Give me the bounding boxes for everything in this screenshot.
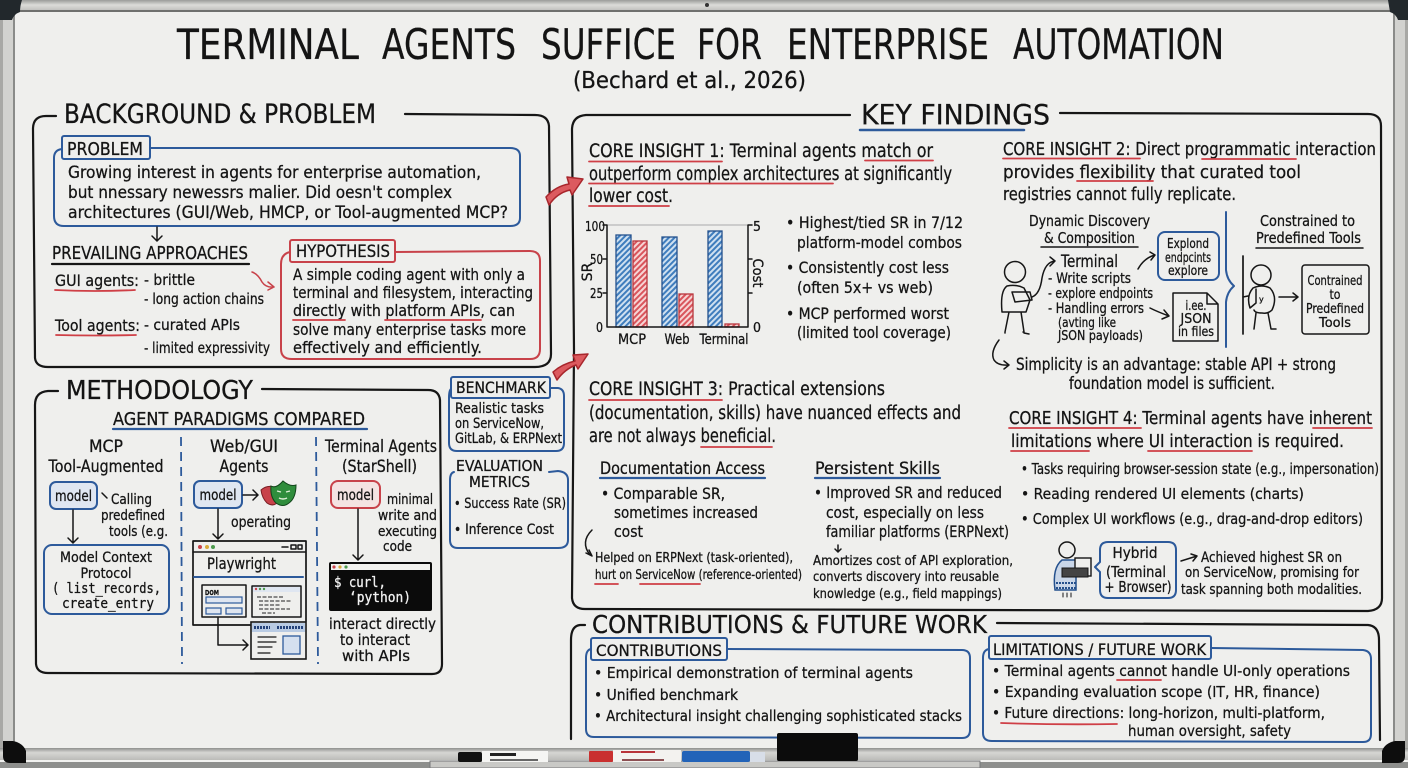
column: terminal agents: code	[383, 539, 412, 555]
callout: simplicity is an advantage: Simplicity is an advantage: stable API + strong	[1016, 355, 1336, 374]
problem box: architectures (GUI/Web, HMCP, or Tool-augmented MCP?	[68, 203, 508, 223]
code panel	[252, 586, 301, 617]
bullet list: insight 1 results: platform-model combos	[797, 233, 962, 252]
persistent skills: familiar platforms (ERPNext)	[826, 522, 1009, 541]
panel: benchmark: GitLab, & ERPNext	[455, 431, 562, 447]
diagram: constrained to predefined tools: Constrained to	[1260, 212, 1355, 230]
model context protocol box: create_entry	[62, 596, 154, 612]
diagram: dynamic discovery and composition: - explore endpoints	[1048, 286, 1153, 302]
documentation access: sometimes increased	[614, 503, 758, 522]
column: terminal agents: (StarShell)	[342, 457, 417, 477]
column: MCP tool-augmented: MCP	[89, 437, 123, 457]
core insight 4: limitations where UI interaction is required.	[1011, 431, 1344, 452]
bar chart: success rate and cost: SR	[580, 262, 596, 281]
bar chart: success rate and cost: 25	[590, 287, 603, 302]
diagram: constrained to predefined tools: Predefined Tools	[1256, 229, 1361, 247]
core insight 3	[585, 379, 1013, 602]
icon: person with laptop	[1054, 542, 1091, 597]
model context protocol box: Model Context	[60, 550, 152, 566]
column: web and GUI agents: operating	[231, 513, 291, 531]
core insight 4	[1009, 408, 1379, 598]
model box	[194, 481, 242, 508]
panel: evaluation metrics: • Success Rate (SR)	[454, 496, 566, 512]
column: MCP tool-augmented: predefined	[101, 508, 165, 524]
document: JSON in files	[1173, 293, 1218, 341]
heading: key findings: KEY FINDINGS	[861, 98, 1050, 131]
diagram: dynamic discovery and composition: Dynamic Discovery	[1029, 212, 1150, 230]
small app window	[251, 622, 306, 659]
core insight 4: on ServiceNow, promising for	[1185, 565, 1359, 581]
prevailing approaches: GUI agents:	[55, 271, 139, 290]
blue marker	[682, 751, 765, 762]
prevailing approaches	[52, 243, 270, 357]
hypothesis box: HYPOTHESIS	[296, 242, 390, 262]
column: MCP tool-augmented: Calling	[111, 492, 152, 508]
box: explore endpoints: Explond	[1167, 237, 1209, 252]
panel: evaluation metrics: METRICS	[469, 473, 530, 491]
core insight 3: (documentation, skills) have nuanced effects and	[589, 403, 961, 424]
column: web and GUI agents: Agents	[220, 457, 269, 477]
panel: background and problem	[33, 99, 551, 367]
heading: agent paradigms compared: AGENT PARADIGMS COMPARED	[113, 409, 365, 430]
bullet list: insight 1 results: (often 5x+ vs web)	[797, 278, 933, 297]
model context protocol box	[44, 545, 169, 614]
hypothesis box: directly with platform APIs, can	[293, 301, 515, 320]
bar chart: success rate and cost: Cost	[749, 258, 765, 288]
box: constrained to predefined tools: Contrained	[1308, 273, 1362, 289]
documentation access: Documentation Access	[600, 459, 765, 478]
terminal window: $ curl,	[334, 575, 386, 591]
DOM panel: DOM	[205, 589, 219, 597]
diagram: dynamic discovery and composition: - Write scripts	[1048, 271, 1131, 287]
panel: benchmark: BENCHMARK	[456, 378, 546, 397]
column: MCP tool-augmented: Tool-Augmented	[48, 457, 163, 477]
bar chart: success rate and cost: MCP	[618, 332, 646, 348]
persistent skills: knowledge (e.g., field mappings)	[813, 586, 1002, 602]
document: JSON in files: in files	[1178, 325, 1214, 340]
prevailing approaches: Tool agents:	[54, 316, 140, 335]
hybrid box: Hybrid	[1112, 544, 1158, 562]
box: explore endpoints: explore	[1168, 264, 1208, 279]
column: terminal agents: interact directly	[329, 615, 436, 633]
black marker	[458, 751, 548, 762]
hypothesis box: effectively and efficiently.	[293, 338, 482, 357]
panel: benchmark: on ServiceNow,	[455, 416, 544, 432]
hybrid box	[1095, 542, 1176, 598]
core insight 1: lower cost.	[589, 186, 673, 207]
title: TERMINAL	[176, 20, 359, 69]
document: JSON in files: i.ee.	[1186, 299, 1206, 314]
model box: model	[200, 486, 236, 504]
heading: background and problem: BACKGROUND & PROBLEM	[64, 99, 376, 130]
persistent skills: converts discovery into reusable	[813, 569, 999, 585]
box: constrained to predefined tools: Tools	[1318, 315, 1351, 331]
icon: person constrained: y	[1259, 295, 1264, 304]
callout: simplicity is an advantage: foundation model is sufficient.	[1069, 374, 1275, 393]
column: terminal agents: executing	[378, 524, 437, 540]
documentation access: hurt on ServiceNow (reference-oriented)	[595, 568, 802, 583]
hypothesis box: A simple coding agent with only a	[293, 265, 525, 284]
eraser	[777, 733, 858, 761]
model box	[50, 482, 97, 509]
panel: contributions and future work	[571, 610, 1380, 742]
limitations and future work box: LIMITATIONS / FUTURE WORK	[993, 640, 1206, 659]
bar chart: success rate and cost: 0	[753, 321, 761, 336]
core insight 3: CORE INSIGHT 3: Practical extensions	[589, 379, 885, 400]
problem box: Growing interest in agents for enterprise automation,	[68, 163, 481, 183]
box: constrained to predefined tools	[1302, 265, 1369, 334]
contributions box	[586, 638, 970, 738]
marker tray	[458, 733, 858, 762]
column: terminal agents	[324, 437, 437, 665]
title: ENTERPRISE	[787, 20, 989, 69]
panel: evaluation metrics	[450, 457, 568, 548]
persistent skills: cost, especially on less	[826, 503, 984, 522]
core insight 4: Achieved highest SR on	[1201, 550, 1342, 566]
title: SUFFICE	[541, 20, 676, 69]
bullet list: insight 1 results: (limited tool coverage)	[797, 323, 951, 342]
diagram: constrained to predefined tools	[1243, 212, 1369, 334]
box: explore endpoints: endpcints	[1165, 251, 1211, 266]
persistent skills: Persistent Skills	[815, 459, 940, 478]
document: JSON in files: JSON	[1180, 312, 1212, 327]
callout: simplicity is an advantage	[993, 340, 1336, 393]
column: terminal agents: write and	[378, 508, 437, 524]
model context protocol box: ( list_records,	[52, 581, 161, 597]
heading: methodology: METHODOLOGY	[66, 376, 253, 406]
limitations and future work box: • Future directions: long-horizon, multi-platform,	[992, 704, 1325, 722]
column: terminal agents: with APIs	[342, 647, 410, 665]
diagram: dynamic discovery and composition: & Composition	[1044, 229, 1135, 247]
title	[176, 20, 1224, 69]
prevailing approaches: - long action chains	[144, 290, 264, 308]
core insight 4: • Reading rendered UI elements (charts)	[1021, 485, 1304, 503]
problem box: but nnessary newessrs malier. Did oesn't complex	[68, 183, 452, 203]
model box: model	[337, 486, 374, 504]
box: constrained to predefined tools: Predefined	[1306, 301, 1364, 317]
bar chart: success rate and cost: Terminal	[699, 332, 748, 348]
heading: contributions and future work: CONTRIBUTIONS & FUTURE WORK	[592, 610, 988, 639]
documentation access: Helped on ERPNext (task-oriented),	[595, 551, 793, 566]
arrow: methodology to key findings	[553, 354, 588, 380]
terminal window	[329, 562, 432, 611]
documentation access: • Comparable SR,	[601, 484, 725, 503]
column: web and GUI agents	[193, 437, 437, 665]
persistent skills	[813, 459, 1013, 602]
bullet list: insight 1 results	[786, 213, 963, 342]
model box: model	[55, 487, 92, 505]
persistent skills: • Improved SR and reduced	[814, 483, 1002, 502]
core insight 2	[993, 139, 1376, 393]
bar chart: success rate and cost	[580, 220, 765, 348]
arrow: model to protocol	[68, 510, 78, 543]
column: MCP tool-augmented	[44, 437, 169, 614]
bullet list: insight 1 results: • Highest/tied SR in 7/12	[786, 213, 963, 232]
hypothesis box: terminal and filesystem, interacting	[293, 283, 533, 302]
persistent skills: Amortizes cost of API exploration,	[813, 553, 1013, 569]
arrow: model to browser	[213, 509, 223, 539]
core insight 4: task spanning both modalities.	[1181, 582, 1362, 598]
arrow: model to terminal	[353, 509, 363, 560]
contributions box: • Architectural insight challenging sophisticated stacks	[594, 707, 962, 725]
core insight 1: CORE INSIGHT 1: Terminal agents match or	[589, 141, 933, 162]
prevailing approaches: - limited expressivity	[144, 339, 270, 357]
column: MCP tool-augmented: tools (e.g.	[109, 524, 168, 540]
documentation access: cost	[614, 522, 643, 541]
hybrid box: (Terminal	[1106, 563, 1166, 581]
box: explore endpoints	[1158, 232, 1219, 280]
arrow: approaches to hypothesis	[252, 272, 274, 290]
panel: evaluation metrics: • Inference Cost	[454, 522, 554, 538]
box: constrained to predefined tools: to	[1330, 287, 1340, 303]
limitations and future work box	[983, 636, 1371, 742]
hypothesis box	[281, 240, 540, 359]
core insight 2: registries cannot fully replicate.	[1003, 184, 1236, 205]
title: AUTOMATION	[1013, 20, 1224, 69]
contributions box: • Unified benchmark	[594, 686, 738, 704]
diagram: dynamic discovery and composition	[1002, 212, 1219, 344]
hypothesis box: solve many enterprise tasks more	[293, 320, 526, 339]
diagram: dynamic discovery and composition: Terminal	[1060, 252, 1118, 272]
browser window: playwright	[193, 541, 306, 659]
diagram: dynamic discovery and composition: - Handling errors	[1048, 301, 1144, 317]
column: web and GUI agents: Web/GUI	[210, 437, 278, 457]
core insight 3: are not always beneficial.	[589, 426, 776, 447]
model context protocol box: Protocol	[80, 566, 132, 582]
model box	[331, 481, 380, 508]
contributions box: • Empirical demonstration of terminal agents	[594, 664, 913, 682]
bar chart: success rate and cost: Web	[664, 332, 690, 348]
panel: evaluation metrics: EVALUATION	[456, 457, 543, 475]
icon: theatre masks	[261, 481, 296, 506]
panel: key findings	[572, 98, 1382, 611]
problem box	[54, 136, 520, 226]
arrow: problem to approaches	[152, 227, 162, 241]
bar chart: success rate and cost: 50	[590, 253, 603, 268]
contributions box: CONTRIBUTIONS	[596, 641, 722, 660]
terminal window: ‘python)	[349, 590, 411, 606]
panel: benchmark	[449, 377, 564, 451]
red marker	[589, 750, 681, 762]
documentation access	[585, 459, 802, 584]
limitations and future work box: • Terminal agents cannot handle UI-only operations	[992, 662, 1350, 680]
limitations and future work box: • Expanding evaluation scope (IT, HR, finance)	[992, 683, 1320, 701]
problem box: PROBLEM	[67, 139, 143, 160]
bar chart: success rate and cost: 5	[753, 220, 761, 235]
prevailing approaches: - curated APIs	[144, 316, 240, 334]
icon: person with notes	[1002, 262, 1032, 334]
core insight 1: outperform complex architectures at significantly	[589, 164, 952, 185]
diagram: dynamic discovery and composition: JSON payloads)	[1057, 329, 1143, 344]
column: terminal agents: to interact	[340, 631, 410, 649]
browser window: playwright: Playwright	[207, 554, 276, 573]
column: terminal agents: minimal	[387, 492, 433, 508]
bar chart: success rate and cost: 100	[585, 220, 605, 235]
bullet list: insight 1 results: • Consistently cost less	[786, 258, 949, 277]
diagram: dynamic discovery and composition: (avting like	[1058, 316, 1116, 331]
prevailing approaches: PREVAILING APPROACHES	[52, 243, 248, 264]
bullet list: insight 1 results: • MCP performed worst	[786, 304, 949, 323]
brace divider	[1226, 212, 1234, 347]
column: terminal agents: Terminal Agents	[324, 437, 437, 457]
limitations and future work box: human oversight, safety	[1128, 722, 1291, 740]
prevailing approaches: - brittle	[144, 271, 195, 289]
title: AGENTS	[382, 20, 516, 69]
subtitle: (Bechard et al., 2026)	[573, 68, 806, 94]
core insight 2: provides flexibility that curated tool	[1003, 162, 1301, 183]
bar chart: success rate and cost: 0	[596, 321, 603, 336]
panel: benchmark: Realistic tasks	[455, 401, 544, 417]
hybrid box: + Browser)	[1104, 578, 1172, 596]
arrow: background to key findings	[546, 177, 583, 205]
core insight 1	[580, 141, 963, 348]
title: FOR	[697, 20, 762, 69]
